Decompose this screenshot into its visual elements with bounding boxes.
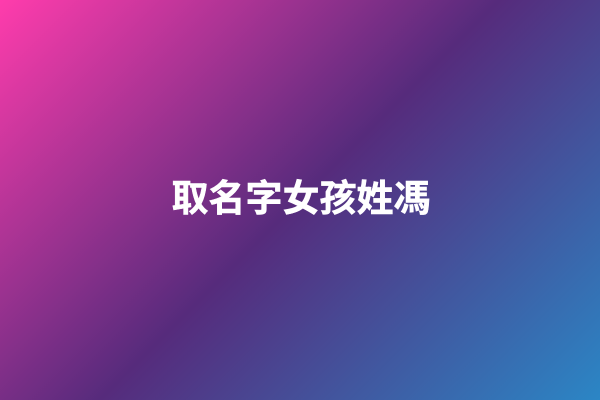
title: 取名字女孩姓馮 — [172, 178, 430, 219]
